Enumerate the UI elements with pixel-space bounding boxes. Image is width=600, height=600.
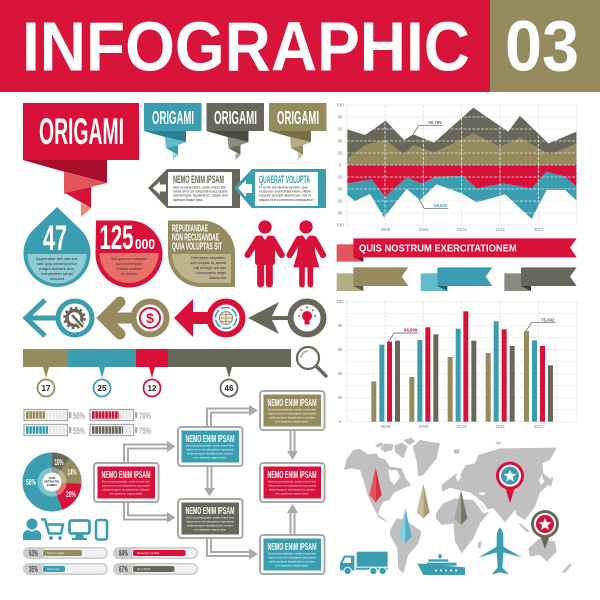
battery 75%: 75% [139,426,151,437]
flow box dark middle: rem aperiam eaque ipsa. [194,528,227,532]
flow box red left [94,463,158,502]
area chart: 40 [338,186,343,191]
small origami ribbon dark: ORIGAMI [214,107,257,128]
flow box olive right: doloremque laudantium, totam [269,416,316,420]
pie chart: QUIS [49,476,56,480]
area chart: 60 [338,198,343,203]
bar chart: 100 [336,299,344,304]
arrow tag: nemo enim ipsam: Sed ut perspiciatis, unde omnis iste [173,186,226,190]
bar chart: 40 [338,371,343,376]
flow box dark middle: natus error sit voluptatem accusanti [186,520,234,524]
red stat: 125 000: eius modi tempora [116,262,142,266]
dark blank ribbon [504,267,577,291]
battery 55% [24,424,85,437]
arrow tag: quaerat volupta: Ut enim ad minima veniam, quis [259,186,308,190]
flow box red left: doloremque laudantium, totam [103,488,150,492]
arrow tag: quaerat volupta: QUAERAT VOLUPTA [259,174,310,186]
map spike markers [369,467,467,543]
pie chart: 56% [26,478,36,487]
olive leaf stat: consequuntur magni [196,271,226,275]
battery 55%: 55% [73,426,85,437]
olive leaf stat: dolores eos [209,276,226,280]
progress bar 84% [113,547,198,559]
bar chart: 2009 [419,424,429,429]
olive leaf stat: REPUDIANDAE [172,224,208,234]
flow box olive right: natus error sit voluptatem accusanti [268,412,316,416]
red title ribbon: QUIS NOSTRUM EXERCITATIONEM [359,243,517,254]
area chart: 60 [338,126,343,131]
bar chart: 60 [338,347,343,352]
red stat: 125 000: Sed quia non numquam [111,257,147,261]
flow box red right: doloremque laudantium, totam [269,488,316,492]
red title ribbon [337,238,577,262]
marker 17: 17 [42,384,51,393]
bar chart: 80 [338,323,343,328]
arrow tag: quaerat volupta: aliquid ex ea commodi consequatur? [259,198,314,202]
teal drop stat: 47 [23,207,90,287]
area chart: 100 [336,102,344,107]
marker 25: 25 [98,384,107,393]
flow box teal middle: rem aperiam eaque ipsa. [194,456,227,460]
battery 70% [90,410,151,422]
area chart: 80 [338,210,343,215]
teal drop stat: 47: 47 [43,219,67,258]
progress bar 84%: 84% [119,549,128,558]
pie chart: 10% [54,458,64,467]
area chart: 40 [338,138,343,143]
area chart: 2010 [457,227,467,232]
icon: truck [340,552,388,575]
progress bar 63% [23,547,108,559]
icon: man and woman [248,220,323,285]
flow box red right: natus error sit voluptatem accusanti [268,484,316,488]
olive leaf stat: quia voluptas sit, aperna [190,261,226,265]
pie chart: 20% [66,490,76,499]
flow box teal right: doloremque laudantium, totam [269,560,316,564]
flow box dark middle: doloremque laudantium, totam [187,524,234,528]
arrow with dollar icon [104,302,166,334]
arrow tag: quaerat volupta: corporis suscipit laboriosam, nisi ut [259,194,311,198]
bar chart: 2010 [457,424,467,429]
flow box red left: natus error sit voluptatem accusanti [102,484,150,488]
area chart: 20 [338,150,343,155]
bar chart: 0 [339,419,342,424]
marker 46 [220,367,238,396]
pie chart [22,452,82,512]
olive leaf stat: QUIA VOLUPTAS SIT [172,242,222,252]
bar chart: 20 [338,395,343,400]
icon: magnifier [297,347,326,376]
bar chart: 2012 [534,424,544,429]
flow box olive right: Sed ut perspiciatis, unde omnis iste [268,408,316,412]
marker 12: 12 [148,384,157,393]
header banner [0,0,600,92]
flow box teal middle: natus error sit voluptatem accusanti [186,448,234,452]
marker 17 [38,367,54,396]
icon: airplane [478,528,522,574]
arrow tag: nemo enim ipsam: NEMO ENIM IPSAM [173,174,224,186]
flow box teal middle: Sed ut perspiciatis, unde omnis iste [186,444,234,448]
progress bar 67% [113,563,198,575]
arrow tag: nemo enim ipsam: doloremque laudantium, totam rem [173,194,228,198]
arrow tag: nemo enim ipsam [148,169,240,208]
olive leaf stat [168,220,235,287]
arrow with gear icon [26,300,92,336]
olive leaf stat: odit aut fugit, sed quia [194,266,226,270]
small origami ribbon teal [144,103,202,160]
battery 50%: 50% [73,411,85,422]
icon: phone [96,520,107,540]
area chart: 80 [338,114,343,119]
teal drop stat: 47: sed quia consequuntur [37,262,78,266]
flow box teal right: Sed ut perspiciatis, unde omnis iste [268,552,316,556]
red stat: 125 000 [96,219,162,288]
bar chart: 75,342 [541,317,555,322]
teal drop stat: 47: voluptatem sequi [41,272,73,276]
flow box teal right [260,535,324,574]
bar chart [336,299,577,429]
teal drop stat: 47: magni dolores eos, [39,267,75,271]
progress bar 35% [23,563,108,575]
red stat: 125 000: et dolore [121,272,137,276]
progress bar 84%: Deserunt mollitia [137,551,160,555]
pie chart: EUMES [47,483,57,487]
progress bar 35%: Animi est [47,567,60,571]
flow box dark middle: NEMO ENIM IPSAM [186,505,235,517]
flow box teal middle [178,427,242,466]
title number: 03 [505,8,579,86]
arrow with dollar icon: $ [146,310,154,326]
olive leaf stat: Enim ipsam voluptatem, [191,256,226,260]
large origami ribbon: ORIGAMI [39,111,124,152]
small origami ribbon olive [269,103,326,160]
area chart: 2011 [496,227,506,232]
teal blank ribbon [421,267,492,291]
arrow tag: nemo enim ipsam: natus error sit voluptatem accusanti [173,190,227,194]
large origami ribbon [23,103,139,217]
bar chart: 2011 [496,424,506,429]
area chart [336,102,577,232]
pie chart: ARTEM PEL [44,480,60,484]
teal drop stat: 47: Aspernatur aut odit aut, [36,257,78,261]
marker 25 [94,367,110,396]
flow box red left: Sed ut perspiciatis, unde omnis iste [102,480,150,484]
flow box olive right [260,391,324,430]
icon: person [23,518,41,540]
bar chart: 66,999 [404,328,418,333]
icon: shopping cart [41,520,63,540]
progress bar 35%: 35% [29,565,38,574]
battery 75% [90,424,151,437]
red stat: 125 000: incidunt, ut labore [116,267,142,271]
flow box dark middle [178,499,242,538]
map pin red and teal star [496,462,524,503]
bar chart: 2008 [381,424,391,429]
battery 50% [24,410,85,422]
progress bar 63%: 63% [29,549,38,558]
teal drop stat: 47: nesciunt [50,277,64,281]
battery 70%: 70% [139,411,151,422]
segmented bar [23,349,291,367]
red stat: 125 000: 000 [135,236,155,253]
flow box olive right: NEMO ENIM IPSAM [268,397,317,409]
progress bar 63%: Sunt in culpa [47,551,65,555]
area chart: 0 [339,162,342,167]
flow box red right: NEMO ENIM IPSAM [268,469,317,481]
small origami ribbon olive: ORIGAMI [277,107,319,128]
icon: monitor [70,520,90,540]
progress bar 67%: Qui officia [137,567,151,571]
progress bar 67%: 67% [119,565,128,574]
area chart: 2008 [381,227,391,232]
pie chart: 14% [68,468,76,477]
olive blank ribbon [337,267,408,291]
arrow with globe icon [174,299,242,337]
arrow tag: quaerat volupta: nostrum exercitationem ullam [259,190,311,194]
flow connector arrows [126,405,298,560]
arrow tag: quaerat volupta [234,169,326,208]
flow box red left: NEMO ENIM IPSAM [102,469,151,481]
area chart: 100 [336,222,344,227]
arrow tag: nemo enim ipsam: aperiam eaque ipsa. [173,198,203,202]
flow box red right: Sed ut perspiciatis, unde omnis iste [268,480,316,484]
flow box dark middle: Sed ut perspiciatis, unde omnis iste [186,516,234,520]
marker 46: 46 [225,384,234,393]
flow box olive right: rem aperiam eaque ipsa. [276,420,309,424]
flow box red left: rem aperiam eaque ipsa. [110,492,143,496]
area chart: 20 [338,174,343,179]
marker 12 [144,367,160,396]
flow box red right: rem aperiam eaque ipsa. [276,492,309,496]
flow box teal right: rem aperiam eaque ipsa. [276,564,309,568]
flow box teal right: natus error sit voluptatem accusanti [268,556,316,560]
flow box teal right: NEMO ENIM IPSAM [268,541,317,553]
area chart: 58,642 [434,203,448,208]
olive leaf stat: NON RECUSANDAE [172,232,219,244]
red stat: 125 000: 125 [100,219,134,257]
world map [344,438,572,574]
arrow with light bulb icon [248,302,324,334]
icon: ship [417,554,465,575]
flow box red right [260,463,324,502]
small origami ribbon teal: ORIGAMI [152,107,194,128]
flow box teal middle: NEMO ENIM IPSAM [186,433,235,445]
map pin dark and red star [531,510,559,549]
area chart: 2009 [419,227,429,232]
title: INFOGRAPHIC [22,8,470,86]
small origami ribbon dark [206,103,264,160]
flow box teal middle: doloremque laudantium, totam [187,452,234,456]
area chart: 50,799 [428,120,442,125]
area chart: 2012 [534,227,544,232]
